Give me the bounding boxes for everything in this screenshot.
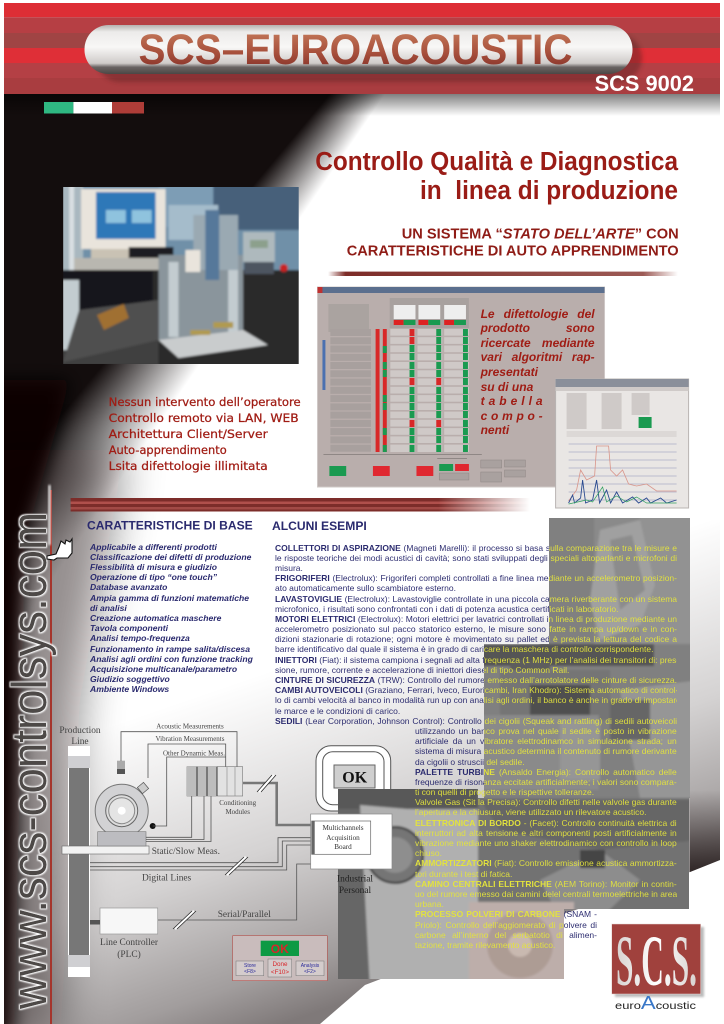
benefits list: Controllo remoto via LAN, WEB	[109, 411, 299, 425]
OK control panel: Analysis	[301, 963, 320, 969]
bus slash marks	[173, 775, 276, 929]
section divider band	[71, 498, 530, 512]
PC and acquisition board	[311, 814, 392, 869]
screenshot: components table	[318, 287, 605, 487]
features list: Analisi agli ordini con funzione tracking	[90, 654, 253, 664]
examples text block: misura.	[275, 563, 303, 573]
examples text block: Valvole Gas (Sit la Precisa): Controllo difetti nelle valvole gas durante	[415, 797, 677, 807]
PC and acquisition board: Board	[334, 843, 352, 851]
main title: in linea di produzione	[420, 177, 678, 205]
features list: Acquisizione multicanale/parametro	[90, 664, 237, 674]
features list: Operazione di tipo “one touch”	[90, 572, 217, 582]
screenshot: performance chart	[556, 379, 689, 508]
callout text on screenshot: c o m p o -	[481, 409, 543, 423]
examples text block: sione, rumore, corrente e accelerazione di iniettori diesel di tipo Common Rail.	[275, 665, 569, 675]
examples text block: accelerometro posizionato sul pacco statorico esterno, le misure sono fatte in rampa up/down e in con-	[275, 624, 677, 634]
callout text on screenshot: t a b e l l a	[481, 394, 543, 408]
signal lines	[90, 732, 312, 920]
line chart	[569, 444, 677, 504]
subtitle	[347, 225, 679, 260]
examples text block: uo del rumore emesso dai camini delel centrali termoelettriche in area	[415, 889, 677, 899]
OK control panel: Done	[272, 961, 288, 968]
diagram labels	[59, 722, 373, 960]
features list: di analisi	[90, 603, 127, 613]
features list	[90, 542, 253, 694]
examples text block: sistema di misura acustico determina il contenuto di rumore derivante	[415, 746, 677, 756]
diagram labels: Industrial	[337, 875, 373, 885]
examples text block: Priolo): Controllo dell’aggiomerato di polvere di	[415, 920, 597, 930]
examples text block: da cigolii o struscii del sedile.	[415, 757, 525, 767]
callout text on screenshot: ricercate mediante	[481, 336, 595, 350]
diagram labels: Digital Lines	[142, 874, 192, 884]
subtitle: UN SISTEMA “STATO DELL’ARTE” CON	[402, 225, 679, 242]
OK control panel	[233, 936, 327, 981]
diagram labels: Line	[71, 737, 89, 747]
diagram labels: Serial/Parallel	[218, 910, 271, 920]
features list: Applicabile a differenti prodotti	[90, 542, 217, 552]
examples text block: barre identificativo dal quale il sistema è in grado di caricare la maschera di controllo corrispondente.	[275, 644, 653, 654]
examples text block: vibrazione mediante uno shaker elettrodinamico con controllo in loop	[415, 838, 677, 848]
callout text on screenshot: Le difettologie del	[481, 307, 595, 321]
production line column	[62, 746, 149, 977]
examples text block: urbana.	[415, 899, 444, 909]
examples text block: le marce e le condizioni di carico.	[275, 706, 400, 716]
photo: washing machine	[328, 779, 478, 989]
examples text block: lo di cambi velocità al banco in modalità run up con analisi agli ordini, il banco è anche in grado di impostare	[275, 695, 681, 705]
examples text block: le risposte teoriche dei modi acustici di cavità; sono stati sviluppati degli speciali altoparlanti e microfoni di	[275, 553, 677, 563]
PLC box	[90, 908, 158, 934]
section headings: ALCUNI ESEMPI	[272, 519, 367, 533]
section headings	[87, 518, 367, 533]
diagram labels: Line Controller	[100, 938, 159, 948]
OK control panel: OK	[271, 942, 289, 956]
logo	[612, 921, 704, 1013]
features list: Flessibilità di misura e giudizio	[90, 562, 217, 572]
logo pill: SCS–EUROACOUSTIC	[138, 26, 572, 74]
callout text on screenshot: vari algoritmi rap-	[481, 350, 595, 364]
features list: Funzionamento in rampe salita/discesa	[90, 644, 250, 654]
examples text block: ti con quelli di progetto e le rispettive tolleranze.	[415, 787, 594, 797]
examples text block: dizioni stazionarie di rotazione; ogni motore è movimentato su pallet ed è prevista la lettura del codice a	[275, 634, 677, 644]
examples text block: ato automaticamente sullo scambiatore esterno.	[275, 583, 456, 593]
benefits list: Lsita difettologie illimitata	[109, 459, 268, 473]
features list: Giudizio soggettivo	[90, 674, 170, 684]
examples text block: interruttori ad alta tensione e altri componenti posti artificialmente in	[415, 828, 677, 838]
photo: test bench	[63, 187, 299, 364]
photo: fan impeller	[469, 902, 574, 989]
examples text block: artificiale da un vibratore elettrodinamco in simulazione strada; un	[415, 736, 677, 746]
benefits list: Auto-apprendimento	[109, 443, 227, 457]
diagram labels: (PLC)	[117, 949, 141, 960]
conditioning modules	[187, 767, 243, 796]
examples text block: microfonico, i risultati sono confrontati con i dati di potenza acustica certificati in laboratorio.	[275, 604, 618, 614]
OK control panel: <F2>	[304, 969, 316, 975]
wiring diagram	[59, 722, 392, 981]
photo: control cabinet	[474, 644, 700, 798]
examples text block: tori durante i test di fatica.	[415, 869, 512, 879]
section headings: CARATTERISTICHE DI BASE	[87, 518, 253, 532]
features list: Ambiente Windows	[90, 684, 169, 694]
benefits list: Architettura Client/Server	[109, 427, 268, 441]
callout text on screenshot	[480, 307, 595, 437]
diagram labels: Modules	[225, 808, 250, 816]
logo pill	[84, 25, 642, 82]
diagram labels: Vibration Measurements	[156, 735, 225, 743]
callout text on screenshot: nenti	[481, 423, 509, 437]
features list: Creazione automatica maschere	[90, 613, 221, 623]
callout text on screenshot: su di una	[481, 380, 533, 394]
examples text block	[275, 545, 681, 950]
callout text on screenshot: prodotto sono	[481, 321, 595, 335]
monitor: OK	[342, 770, 368, 786]
features list: Database avanzato	[90, 582, 167, 592]
diagram labels: Static/Slow Meas.	[152, 847, 220, 857]
photo: wiring on table	[476, 796, 690, 909]
OK control panel: <F10>	[271, 969, 289, 976]
photo: gray collage	[328, 508, 700, 989]
table rows	[330, 329, 470, 452]
model number: SCS 9002	[595, 71, 694, 96]
subtitle: CARATTERISTICHE DI AUTO APPRENDIMENTO	[347, 243, 679, 260]
features list: Ampia gamma di funzioni matematiche	[90, 593, 249, 603]
main title	[315, 148, 679, 205]
features list: Analisi tempo-frequenza	[90, 633, 190, 643]
features list: Classificazione dei difetti di produzione	[90, 552, 251, 562]
URL side strip: www.scs-controlsys.com	[3, 512, 57, 1010]
examples text block: l’apertura e la chiusura, viene utilizzato un rilevatore acustico.	[415, 807, 647, 817]
callout text on screenshot: presentati	[481, 365, 538, 379]
main title: Controllo Qualità e Diagnostica	[315, 148, 679, 176]
motor with sensors	[95, 761, 156, 846]
OK control panel: Store	[244, 963, 256, 969]
PC and acquisition board: Acquisition	[326, 834, 360, 842]
features list: Tavola componenti	[90, 623, 168, 633]
diagram labels: Conditioning	[219, 799, 257, 807]
title rule	[328, 272, 678, 276]
examples text block: tazione, tramite rilevamento acustico.	[415, 940, 555, 950]
diagram labels: Personal	[339, 886, 372, 896]
diagram labels: Production	[59, 726, 101, 736]
examples text block: chiuso.	[415, 848, 442, 858]
examples text block: utilizzando un banco prova nel quale il sedile è posto in vibrazione	[415, 726, 677, 736]
examples text block: carbone all’interno del serbatotio di alimen-	[415, 930, 597, 940]
photo: car seat	[539, 518, 690, 646]
benefits list: Nessun intervento dell’operatore	[109, 395, 301, 409]
examples text block: frequenze di risonanza eccitate artificialmente; i valori sono compara-	[415, 777, 677, 787]
diagram labels: Other Dynamic Meas.	[163, 750, 225, 758]
logo: euro A coustic	[615, 993, 696, 1013]
OK control panel: <F8>	[244, 969, 256, 975]
diagram labels: Acoustic Measurements	[156, 722, 224, 730]
PC and acquisition board: Multichannels	[322, 824, 364, 832]
header band	[4, 3, 720, 96]
flag	[44, 102, 144, 114]
monitor	[316, 746, 391, 811]
benefits list	[109, 395, 301, 473]
icon: pointing hand	[47, 539, 72, 560]
